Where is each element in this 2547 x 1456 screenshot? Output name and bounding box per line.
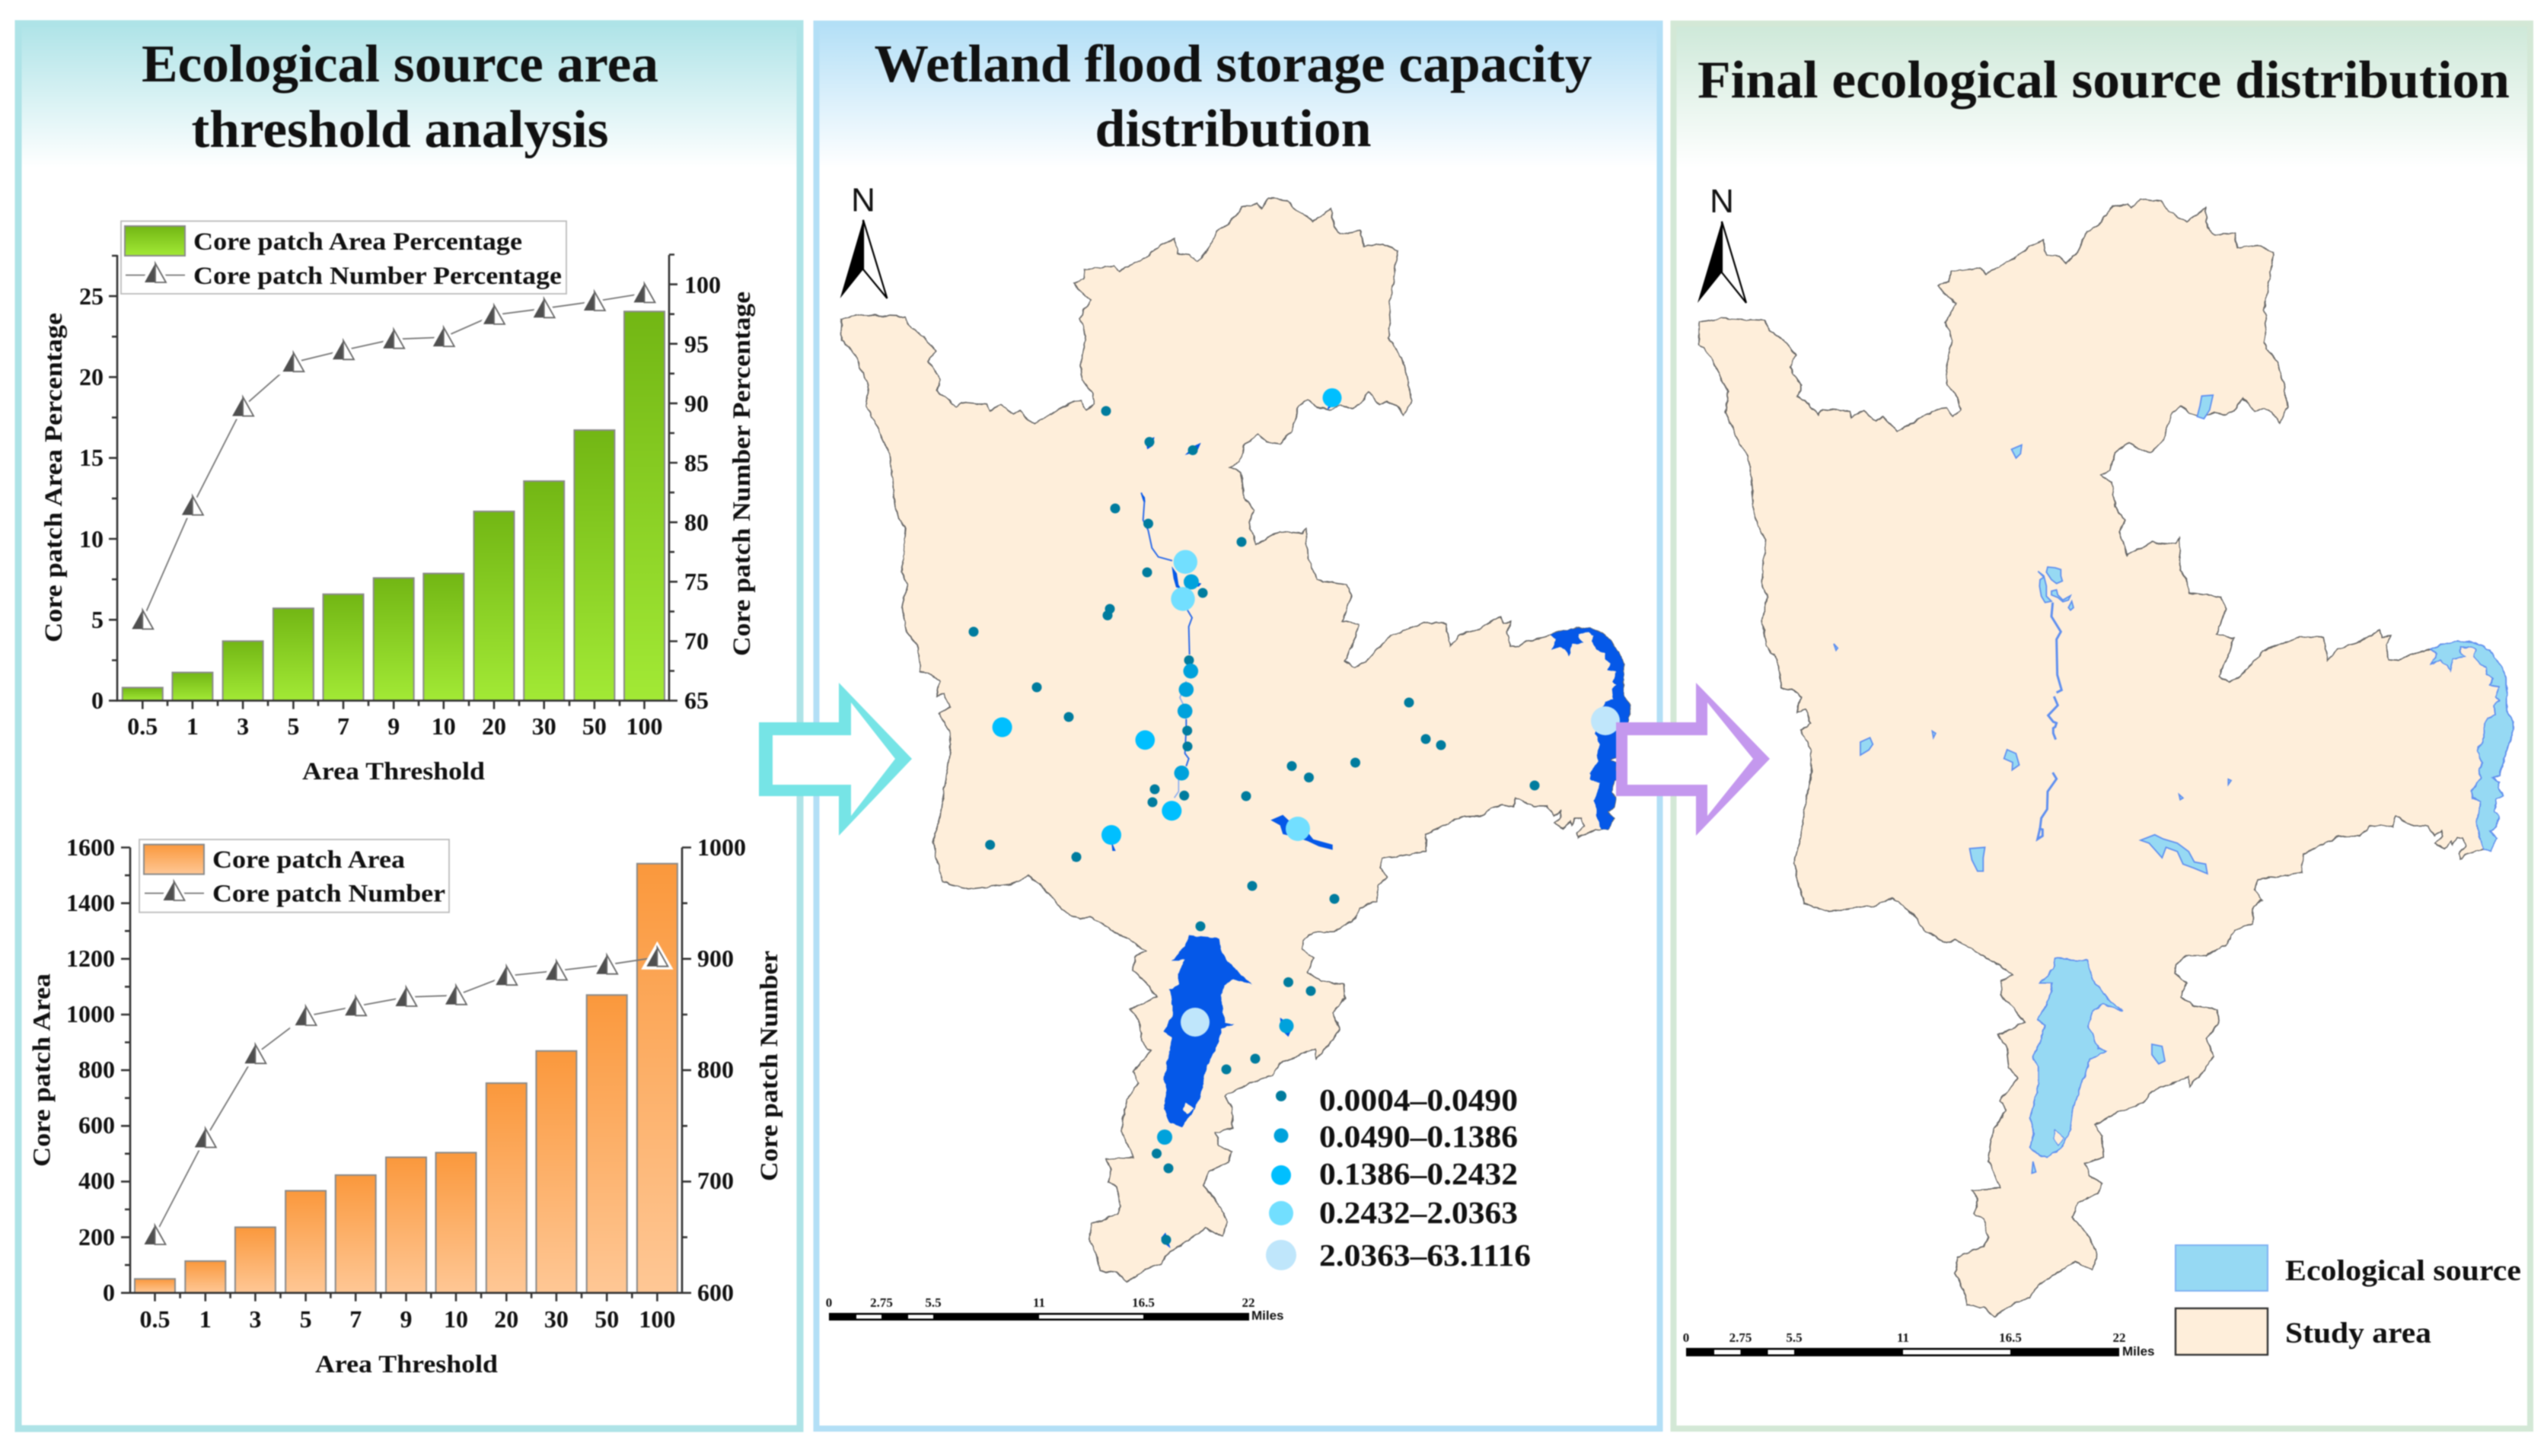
small water patches: north — [1146, 390, 1341, 455]
x tick labels: 10 — [444, 1305, 468, 1333]
line series: core patch number — [143, 946, 669, 1245]
left tick labels: 800 — [78, 1056, 115, 1083]
axes and ticks — [121, 848, 691, 1301]
wetland points: class 1 — [968, 406, 1539, 1245]
x axis title: Area Threshold — [302, 758, 485, 785]
north arrow: N — [1710, 183, 1734, 220]
bars: core patch area — [135, 864, 677, 1293]
left tick labels — [66, 833, 115, 1306]
scale bar: 16.5 — [1132, 1295, 1155, 1310]
legend: storage classes: 0.1386–0.2432 — [1319, 1156, 1518, 1191]
legend: ecological source: Ecological source — [2285, 1254, 2521, 1287]
legend: Core patch Area — [212, 846, 405, 874]
left tick labels: 1200 — [66, 945, 115, 972]
axes and ticks — [109, 254, 677, 709]
right tick labels — [684, 271, 721, 714]
right tick labels: 75 — [684, 568, 709, 595]
left tick labels: 200 — [78, 1223, 115, 1251]
left tick labels: 1400 — [66, 889, 115, 916]
panel: final ecological source — [1673, 24, 2530, 1429]
bars: area percentage — [123, 311, 665, 701]
scale bar: 11 — [1033, 1295, 1045, 1310]
heading: final ecological source: Final ecological source distribution — [1697, 51, 2510, 110]
wetland points: class 4 — [1171, 550, 1310, 841]
left tick labels: 20 — [79, 363, 104, 390]
left tick labels: 10 — [79, 525, 104, 553]
panel: threshold analysis — [18, 24, 800, 1429]
right tick labels: 90 — [684, 390, 709, 417]
scale bar: 5.5 — [1786, 1330, 1803, 1345]
left tick labels: 5 — [91, 606, 104, 633]
heading: wetland flood storage: distribution — [1095, 100, 1372, 158]
heading: wetland flood storage — [874, 35, 1592, 158]
sources: north and centre — [1834, 395, 2231, 800]
heading: threshold analysis: Ecological source area — [142, 35, 658, 94]
x tick labels: 100 — [639, 1305, 675, 1333]
scale bar: 2.75 — [870, 1295, 893, 1310]
heading: wetland flood storage: Wetland flood storage capacity — [874, 35, 1592, 94]
right tick labels: 100 — [684, 271, 721, 298]
left tick labels: 0 — [103, 1279, 115, 1306]
x tick labels: 7 — [349, 1305, 362, 1333]
scale bar — [1683, 1330, 2155, 1359]
scale bar: 5.5 — [925, 1295, 942, 1310]
right axis title: Core patch Number Percentage — [728, 292, 756, 656]
chart: core patch area — [29, 833, 783, 1378]
legend: storage classes: 2.0363–63.1116 — [1319, 1238, 1531, 1273]
small water patches: south — [1073, 815, 1333, 1248]
right tick labels: 85 — [684, 449, 709, 476]
left axis title: Core patch Area Percentage — [40, 313, 68, 642]
x tick labels: 3 — [249, 1305, 261, 1333]
right tick labels — [697, 833, 746, 1306]
heading: threshold analysis — [142, 35, 658, 159]
study area and large lakes — [1699, 198, 2514, 1316]
left axis title: Core patch Area — [29, 973, 56, 1167]
legend: study area: Study area — [2285, 1317, 2431, 1349]
north arrow — [840, 181, 887, 298]
x axis title: Area Threshold — [315, 1351, 498, 1378]
left tick labels: 25 — [79, 282, 104, 310]
left tick labels: 1600 — [66, 833, 115, 861]
river system — [1141, 492, 1201, 798]
left tick labels: 400 — [78, 1167, 115, 1194]
right tick labels: 800 — [697, 1056, 734, 1083]
arrow: purple to final map — [1616, 683, 1770, 836]
legend — [139, 840, 449, 913]
right tick labels: 70 — [684, 627, 709, 655]
legend: Core patch Area Percentage — [193, 228, 522, 256]
legend — [121, 221, 566, 294]
x tick labels: 100 — [626, 712, 662, 740]
right tick labels: 900 — [697, 945, 734, 972]
scale bar: 0 — [1683, 1330, 1689, 1345]
legend: storage classes — [1266, 1082, 1531, 1273]
x tick labels: 20 — [482, 712, 506, 740]
legend: storage classes: 0.0490–0.1386 — [1319, 1119, 1518, 1154]
x tick labels: 0.5 — [127, 712, 158, 740]
wetland points: class 2 — [1157, 574, 1294, 1145]
legend: Core patch Number Percentage — [193, 263, 562, 290]
x tick labels: 50 — [595, 1305, 619, 1333]
study area and large lakes — [841, 198, 1631, 1282]
wetland points: class 3 — [993, 388, 1341, 845]
x tick labels: 5 — [287, 712, 299, 740]
scale bar: 16.5 — [1999, 1330, 2022, 1345]
legend: storage classes: 0.0004–0.0490 — [1319, 1082, 1518, 1117]
scale bar: 22 — [1242, 1295, 1254, 1310]
scale bar: 0 — [826, 1295, 832, 1310]
panel: wetland flood storage — [816, 24, 1659, 1429]
right tick labels: 80 — [684, 508, 709, 536]
heading: threshold analysis: threshold analysis — [192, 100, 609, 159]
right axis title: Core patch Number — [756, 951, 783, 1181]
x tick labels — [127, 712, 663, 740]
x tick labels: 0.5 — [140, 1305, 171, 1333]
chart: core patch area percentage — [40, 221, 756, 785]
left tick labels: 1000 — [66, 1000, 115, 1027]
sources: south — [1969, 835, 2208, 1173]
x tick labels: 3 — [237, 712, 249, 740]
right tick labels: 600 — [697, 1279, 734, 1306]
x tick labels: 7 — [337, 712, 349, 740]
left tick labels: 15 — [79, 444, 104, 471]
x tick labels: 1 — [186, 712, 199, 740]
x tick labels: 9 — [400, 1305, 413, 1333]
right tick labels: 700 — [697, 1167, 734, 1194]
line series: number percentage — [130, 282, 657, 630]
legend: Core patch Number — [212, 880, 445, 907]
north arrow — [1697, 183, 1746, 303]
scale bar: Miles — [1251, 1308, 1284, 1323]
x tick labels: 30 — [532, 712, 556, 740]
x tick labels: 10 — [432, 712, 456, 740]
right tick labels: 95 — [684, 330, 709, 358]
right tick labels: 65 — [684, 687, 709, 714]
scale bar: Miles — [2122, 1344, 2155, 1359]
left tick labels: 600 — [78, 1111, 115, 1139]
scale bar: 22 — [2113, 1330, 2125, 1345]
map: wetland flood storage capacity — [826, 181, 1631, 1323]
right tick labels: 1000 — [697, 833, 746, 861]
map: final ecological source distribution — [1683, 183, 2521, 1359]
legend: storage classes: 0.2432–2.0363 — [1319, 1195, 1518, 1230]
scale bar: 2.75 — [1729, 1330, 1752, 1345]
legend: study area — [2176, 1308, 2431, 1355]
x tick labels: 1 — [199, 1305, 212, 1333]
x tick labels: 20 — [494, 1305, 518, 1333]
x tick labels: 5 — [300, 1305, 312, 1333]
scale bar: 11 — [1897, 1330, 1909, 1345]
x tick labels: 9 — [387, 712, 400, 740]
wetland points: class 5 — [1181, 706, 1620, 1037]
left tick labels: 0 — [91, 687, 104, 714]
x tick labels — [140, 1305, 675, 1333]
x tick labels: 30 — [544, 1305, 569, 1333]
scale bar — [826, 1295, 1284, 1323]
north arrow: N — [851, 181, 875, 219]
left tick labels — [79, 282, 104, 714]
legend: ecological source — [2176, 1245, 2521, 1291]
river system — [2004, 567, 2074, 840]
x tick labels: 50 — [582, 712, 607, 740]
arrow: cyan to map — [759, 683, 912, 836]
